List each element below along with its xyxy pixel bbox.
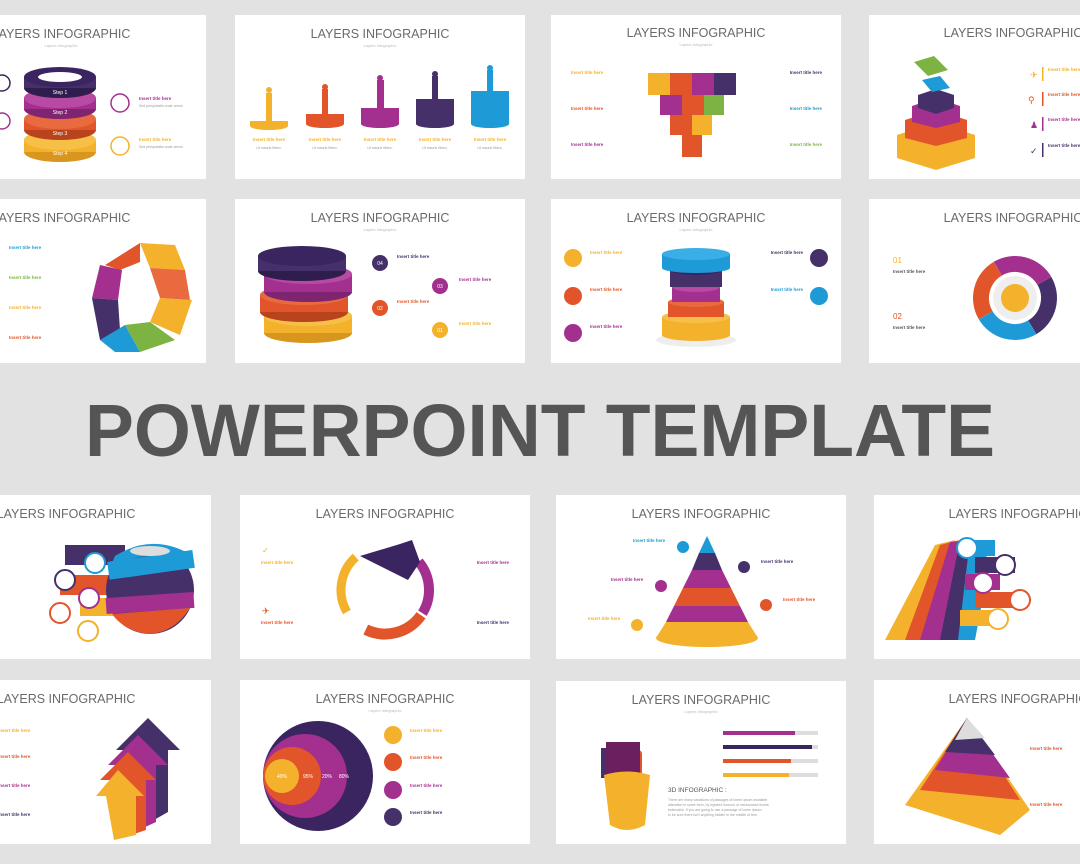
slide: 3D arrow ring: Insert title here [9,275,42,280]
slide: podium cylinders [235,15,525,179]
slide: concentric circles: 40% [277,774,288,780]
slide: stacked rings steps: Layers Infographic [45,43,77,48]
slide: layered cone tilted: Insert title here [1030,802,1063,807]
slide: podium cylinders: LAYERS INFOGRAPHIC [311,27,449,41]
slide: podium cylinders: Insert title here [474,137,507,142]
slide: stepped pyramid [869,15,1080,179]
slide: stacked discs with numbers: 03 [437,284,443,290]
slide: cup with progress bars: to be sure there isn't anything hidden in the middle of text. [668,813,758,817]
slide: stacked rings steps: Insert title here [139,137,172,142]
slide: stacked discs with numbers: Insert title here [397,254,430,259]
slide: layered cone: Insert title here [588,616,621,621]
slide: concentric circles: LAYERS INFOGRAPHIC [316,692,454,706]
slide: cup with progress bars: Layers Infographic [685,709,717,714]
slide: stepped pyramid: ✓ [1030,146,1038,156]
slide: stacked discs with numbers: 04 [377,261,383,267]
slide: cube triangle [551,15,841,179]
slide: cube triangle: Insert title here [790,142,822,147]
slide: cup with progress bars: 3D INFOGRAPHIC : [668,787,727,794]
slide: layered cone tilted: Insert title here [1030,746,1063,751]
slide: cube triangle: Insert title here [571,70,604,75]
slide: stacked rings steps: Step 4 [53,151,67,157]
slide: layered cone [556,495,846,659]
slide: concentric circles: Layers Infographic [369,708,401,713]
slide: 3D arrow ring: Insert title here [9,305,42,310]
slide: stepped pyramid: ⚲ [1028,95,1035,105]
slide: concentric circles: 95% [303,774,314,780]
slide: 3D arrow ring [0,199,206,363]
slide: cup with progress bars [556,681,846,844]
slide: stacked rings steps: Step 1 [53,90,67,96]
slide: circular arrows: Insert title here [261,560,294,565]
slide: stacked rings steps: Insert title here [139,96,172,101]
slide: cylinder tower with icons: Insert title here [771,287,803,292]
slide: podium cylinders: Insert title here [253,137,286,142]
slide: segmented ring: 01 [893,256,902,265]
slide: circular arrows: ✓ [262,546,269,555]
slide: cylinder tower with icons: Layers Infographic [680,227,712,232]
slide: 3D arrows up: LAYERS INFOGRAPHIC [0,692,135,706]
slide: stepped pyramid: Insert title here [1048,92,1080,97]
slide: segmented ring: LAYERS INFOGRAPHIC [944,211,1080,225]
slide: stacked rings steps: Step 3 [53,131,67,137]
slide: cylinder tower with icons: Insert title here [771,250,803,255]
slide: stacked rings steps: Step 2 [53,110,67,116]
slide: stepped pyramid: Insert title here [1048,67,1080,72]
slide: concentric circles: Insert title here [410,783,443,788]
slide: cylinder tower with icons [551,199,841,363]
slide: podium cylinders: Insert title here [309,137,342,142]
slide: stacked discs with numbers: 01 [437,328,443,334]
slide: cup with progress bars: LAYERS INFOGRAPHIC [632,693,770,707]
slide: stacked discs with numbers: Insert title here [459,321,492,326]
slide: circular arrows: Insert title here [261,620,294,625]
slide: slanted prism [874,495,1080,659]
slide: concentric circles: 80% [339,774,350,780]
slide: stacked discs with numbers: Layers Infographic [364,227,396,232]
slide: segmented ring: Insert title here [893,325,926,330]
slide: layered cone: Insert title here [761,559,794,564]
slide: stepped pyramid: ♟ [1030,120,1038,130]
slide: podium cylinders: Layers Infographic [364,43,396,48]
slide: stepped pyramid: ✈ [1030,70,1038,80]
slide: cup with progress bars: There are many variations of passages of lorem ipsum available [668,798,767,802]
slide: concentric circles: 20% [322,774,333,780]
main title: POWERPOINT TEMPLATE [85,389,995,472]
slide: cylinder tower with icons: LAYERS INFOGRAPHIC [627,211,765,225]
slide: concentric circles: Insert title here [410,728,443,733]
slide: cube triangle: LAYERS INFOGRAPHIC [627,26,765,40]
slide: cylinder tower with icons: Insert title here [590,250,623,255]
slide: stacked discs with numbers [235,199,525,363]
slide: circular arrows: Insert title here [477,620,509,625]
slide: stacked discs with numbers: Insert title here [459,277,492,282]
slide: 3D arrow ring: Insert title here [9,245,42,250]
slide: stacked rings steps: Sed perspiciatis unde omnis [139,104,183,108]
slide: 3D arrows up [0,680,211,844]
slide: stacked discs with numbers: Insert title here [397,299,430,304]
slide: concentric circles: Insert title here [410,810,443,815]
slide: podium cylinders: Ut mauris libero, [256,146,282,150]
slide: stacked rings steps [0,15,206,179]
slide: cube triangle: Insert title here [571,106,604,111]
slide: stacked rings steps: Sed perspiciatis unde omnis [139,145,183,149]
slide: cube triangle: Insert title here [790,106,822,111]
slide: segmented ring: 02 [893,312,902,321]
slide: stacked discs with numbers: LAYERS INFOGRAPHIC [311,211,449,225]
slide: cube triangle: Insert title here [790,70,822,75]
slide: stepped pyramid: LAYERS INFOGRAPHIC [944,26,1080,40]
slide: concentric circles [240,680,530,844]
slide: podium cylinders: Ut mauris libero, [477,146,503,150]
slide: layered cone: Insert title here [611,577,644,582]
slide: stepped pyramid: Insert title here [1048,143,1080,148]
slide: layered cone: LAYERS INFOGRAPHIC [632,507,770,521]
slide: podium cylinders: Insert title here [364,137,397,142]
slide: podium cylinders: Insert title here [419,137,452,142]
slide: circular arrows: ✈ [262,606,270,616]
slide: circular arrows: LAYERS INFOGRAPHIC [316,507,454,521]
slide: layered cone: Insert title here [783,597,816,602]
slide: cylinder tower with icons: Insert title here [590,324,623,329]
slide: podium cylinders: Ut mauris libero, [312,146,338,150]
slide: cylinder tower with icons: Insert title here [590,287,623,292]
slide: circular arrows [240,495,530,659]
slide: layered cone tilted [874,680,1080,844]
slide: cube triangle: Insert title here [571,142,604,147]
slide: cup with progress bars: believable. If you are going to use a passage of lorem ipsum. [668,808,762,812]
slide: cup with progress bars: alteration in some form, by injected humour or randomised words [668,803,769,807]
slide: 3D arrow ring: Insert title here [9,335,42,340]
slide: stacked discs with numbers: 02 [377,306,383,312]
slide: banded sphere with icons: LAYERS INFOGRAPHIC [0,507,135,521]
slide: banded sphere with icons [0,495,211,659]
slide: concentric circles: Insert title here [410,755,443,760]
slide: segmented ring [869,199,1080,363]
slide: podium cylinders: Ut mauris libero, [367,146,393,150]
slide: stepped pyramid: Insert title here [1048,117,1080,122]
slide: circular arrows: Insert title here [477,560,509,565]
slide: segmented ring: Insert title here [893,269,926,274]
slide: cube triangle: Layers Infographic [680,42,712,47]
slide: podium cylinders: Ut mauris libero, [422,146,448,150]
slide: layered cone: Insert title here [633,538,666,543]
